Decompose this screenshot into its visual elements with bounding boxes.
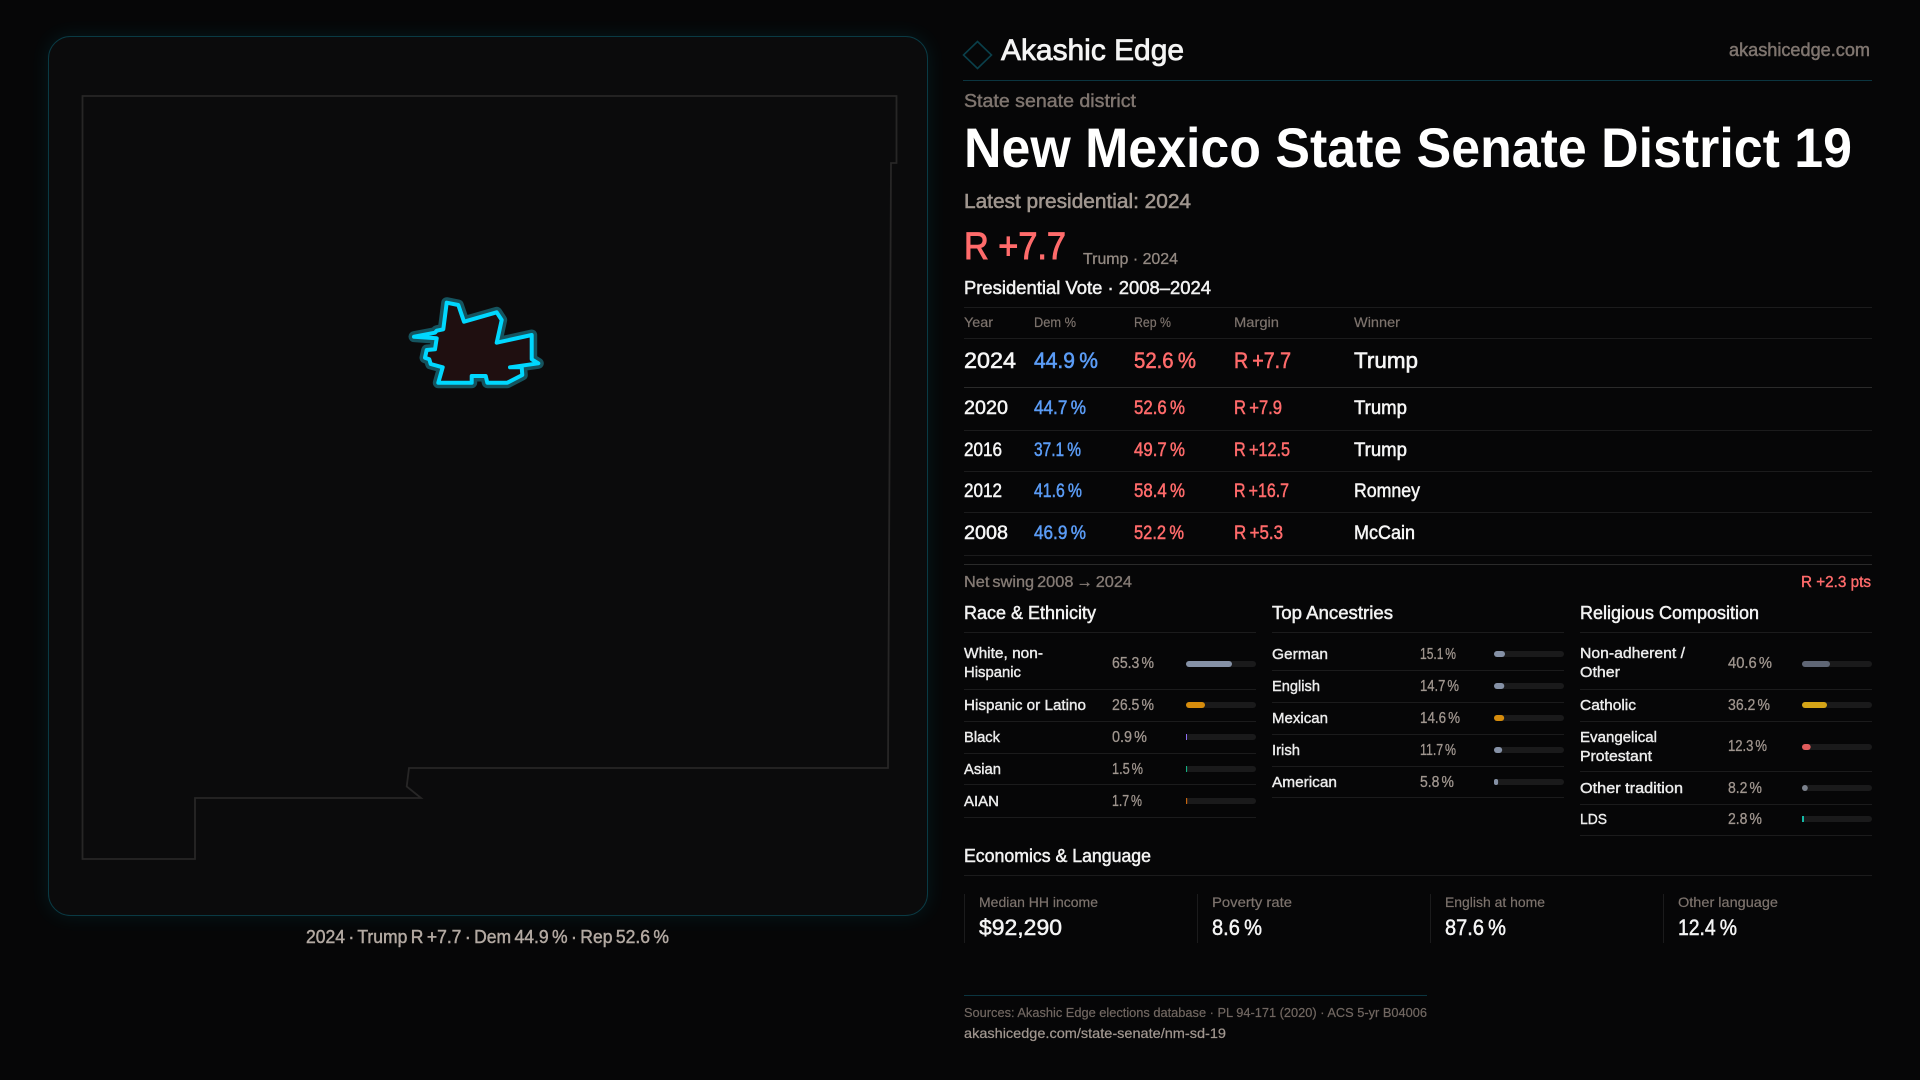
margin winner note: Trump · 2024 <box>1083 251 1178 268</box>
stat: poverty rate: 8.6 % <box>1212 915 1262 940</box>
row: german <box>1272 646 1564 663</box>
brand header <box>964 34 1870 68</box>
row 2016 <box>964 440 1407 461</box>
row: evangelical <box>1580 729 1872 765</box>
eyebrow: district type: State senate district <box>964 91 1136 111</box>
row: non-adherent: Other <box>1580 664 1620 681</box>
row 2020: R +7.9 <box>1234 398 1282 419</box>
table header row: Year <box>964 314 993 330</box>
headline margin <box>964 226 1178 268</box>
row: english <box>1272 678 1564 695</box>
row 2024: Trump <box>1354 348 1418 373</box>
heading: Economics & Language <box>964 846 1151 866</box>
row: white <box>964 645 1256 681</box>
row: american: 5.8 % <box>1420 774 1454 791</box>
net swing row: Net swing 2008 → 2024 <box>964 574 1132 591</box>
row 2024: R +7.7 <box>1234 348 1291 373</box>
page url: akashicedge.com/state-senate/nm-sd-19 <box>964 1025 1226 1041</box>
row 2024 <box>964 348 1418 373</box>
row: lds: 2.8 % <box>1728 811 1762 828</box>
heading: Race & Ethnicity <box>964 603 1096 623</box>
row: aian: 1.7 % <box>1112 793 1142 810</box>
margin value: R +7.7 <box>964 226 1066 268</box>
table header row <box>964 314 1400 330</box>
row: other tradition: Other tradition <box>1580 780 1683 797</box>
stat: median income: Median HH income <box>979 894 1098 910</box>
row: catholic: 36.2 % <box>1728 697 1770 714</box>
row 2008: 2008 <box>964 523 1008 544</box>
row 2012: 41.6 % <box>1034 481 1082 502</box>
net swing row: R +2.3 pts <box>1801 574 1871 591</box>
row: lds: LDS <box>1580 811 1607 828</box>
row: american <box>1272 774 1564 791</box>
row 2008: 52.2 % <box>1134 523 1184 544</box>
net swing row <box>964 574 1871 591</box>
table header row: Margin <box>1234 314 1279 330</box>
row: german: German <box>1272 646 1328 663</box>
stat: other language <box>1664 894 1778 943</box>
row: white: 65.3 % <box>1112 655 1154 672</box>
row: german: 15.1 % <box>1420 646 1456 663</box>
row: non-adherent: 40.6 % <box>1728 655 1772 672</box>
panel: economics and language <box>964 846 1872 943</box>
row: evangelical: Evangelical <box>1580 729 1657 746</box>
stat: other language: Other language <box>1678 894 1778 910</box>
stat: english at home: English at home <box>1445 894 1545 910</box>
row 2016: 2016 <box>964 440 1002 461</box>
row: aian <box>964 793 1256 810</box>
row 2020 <box>964 398 1407 419</box>
stat: median income <box>964 894 1098 943</box>
row: white: White, non- <box>964 645 1043 662</box>
row 2012 <box>964 481 1420 502</box>
map: New Mexico state outline <box>82 96 896 859</box>
row: irish <box>1272 742 1564 759</box>
stat: english at home: 87.6 % <box>1445 915 1506 940</box>
row: asian <box>964 761 1256 778</box>
row: asian: 1.5 % <box>1112 761 1143 778</box>
row: white: Hispanic <box>964 664 1021 681</box>
row: asian: Asian <box>964 761 1001 778</box>
site url: akashicedge.com <box>1729 40 1870 60</box>
row: aian: AIAN <box>964 793 999 810</box>
row 2024: 44.9 % <box>1034 348 1098 373</box>
heading: Religious Composition <box>1580 603 1759 623</box>
stat: poverty rate: Poverty rate <box>1212 894 1292 910</box>
row: lds <box>1580 811 1872 828</box>
row 2012: Romney <box>1354 481 1420 502</box>
stat: other language: 12.4 % <box>1678 915 1737 940</box>
row: evangelical: 12.3 % <box>1728 738 1767 755</box>
row: hispanic: Hispanic or Latino <box>964 697 1086 714</box>
row 2020: Trump <box>1354 398 1407 419</box>
row: mexican <box>1272 710 1564 727</box>
row: american: American <box>1272 774 1337 791</box>
row 2008: McCain <box>1354 523 1415 544</box>
row 2016: R +12.5 <box>1234 440 1290 461</box>
row 2016: 37.1 % <box>1034 440 1081 461</box>
row 2012: 58.4 % <box>1134 481 1185 502</box>
title: New Mexico State Senate District 19 <box>964 116 1852 179</box>
table header row: Rep % <box>1134 314 1171 330</box>
map: district 19 highlighted shape <box>414 303 538 383</box>
row 2012: R +16.7 <box>1234 481 1289 502</box>
brand name: Akashic Edge <box>1001 34 1184 67</box>
row: english: English <box>1272 678 1320 695</box>
row: evangelical: Protestant <box>1580 748 1653 765</box>
row: non-adherent <box>1580 645 1872 681</box>
row 2016: 49.7 % <box>1134 440 1185 461</box>
heading: Top Ancestries <box>1272 603 1393 623</box>
row: black <box>964 729 1256 746</box>
icon: brand diamond <box>964 42 992 68</box>
stat: poverty rate <box>1198 894 1292 943</box>
row: black: 0.9 % <box>1112 729 1147 746</box>
row: black: Black <box>964 729 1000 746</box>
row 2024: 2024 <box>964 348 1016 373</box>
row: mexican: Mexican <box>1272 710 1328 727</box>
row 2020: 44.7 % <box>1034 398 1086 419</box>
row: other tradition: 8.2 % <box>1728 780 1762 797</box>
sources text: Sources: Akashic Edge elections database · PL 94-171 (2020) · ACS 5-yr B04006 <box>964 1005 1427 1020</box>
row: other tradition <box>1580 780 1872 797</box>
table header row: Winner <box>1354 314 1400 330</box>
panel: map <box>48 36 928 916</box>
row: non-adherent: Non-adherent / <box>1580 645 1686 662</box>
panel: religious composition <box>1580 603 1872 836</box>
subtitle: latest presidential: Latest presidential: 2024 <box>964 191 1191 213</box>
row 2024: 52.6 % <box>1134 348 1196 373</box>
row 2008: R +5.3 <box>1234 523 1283 544</box>
row 2020: 52.6 % <box>1134 398 1185 419</box>
panel: race and ethnicity <box>964 603 1256 818</box>
panel: top ancestries <box>1272 603 1564 798</box>
row: catholic: Catholic <box>1580 697 1637 714</box>
row 2016: Trump <box>1354 440 1407 461</box>
row: english: 14.7 % <box>1420 678 1459 695</box>
row: irish: 11.7 % <box>1420 742 1456 759</box>
row: catholic <box>1580 697 1872 714</box>
table header row: Dem % <box>1034 314 1076 330</box>
row: mexican: 14.6 % <box>1420 710 1460 727</box>
row 2012: 2012 <box>964 481 1002 502</box>
table: presidential vote <box>964 308 1872 556</box>
footer: sources <box>964 996 1427 1041</box>
row 2020: 2020 <box>964 398 1008 419</box>
stat: median income: $92,290 <box>979 915 1062 940</box>
stat: english at home <box>1430 894 1545 943</box>
row 2008 <box>964 523 1415 544</box>
map caption: 2024 · Trump R +7.7 · Dem 44.9 % · Rep 52.6 % <box>306 927 669 947</box>
row: irish: Irish <box>1272 742 1300 759</box>
section heading: presidential vote: Presidential Vote · 2008–2024 <box>964 278 1211 298</box>
row: hispanic <box>964 697 1256 714</box>
row 2008: 46.9 % <box>1034 523 1086 544</box>
row: hispanic: 26.5 % <box>1112 697 1154 714</box>
